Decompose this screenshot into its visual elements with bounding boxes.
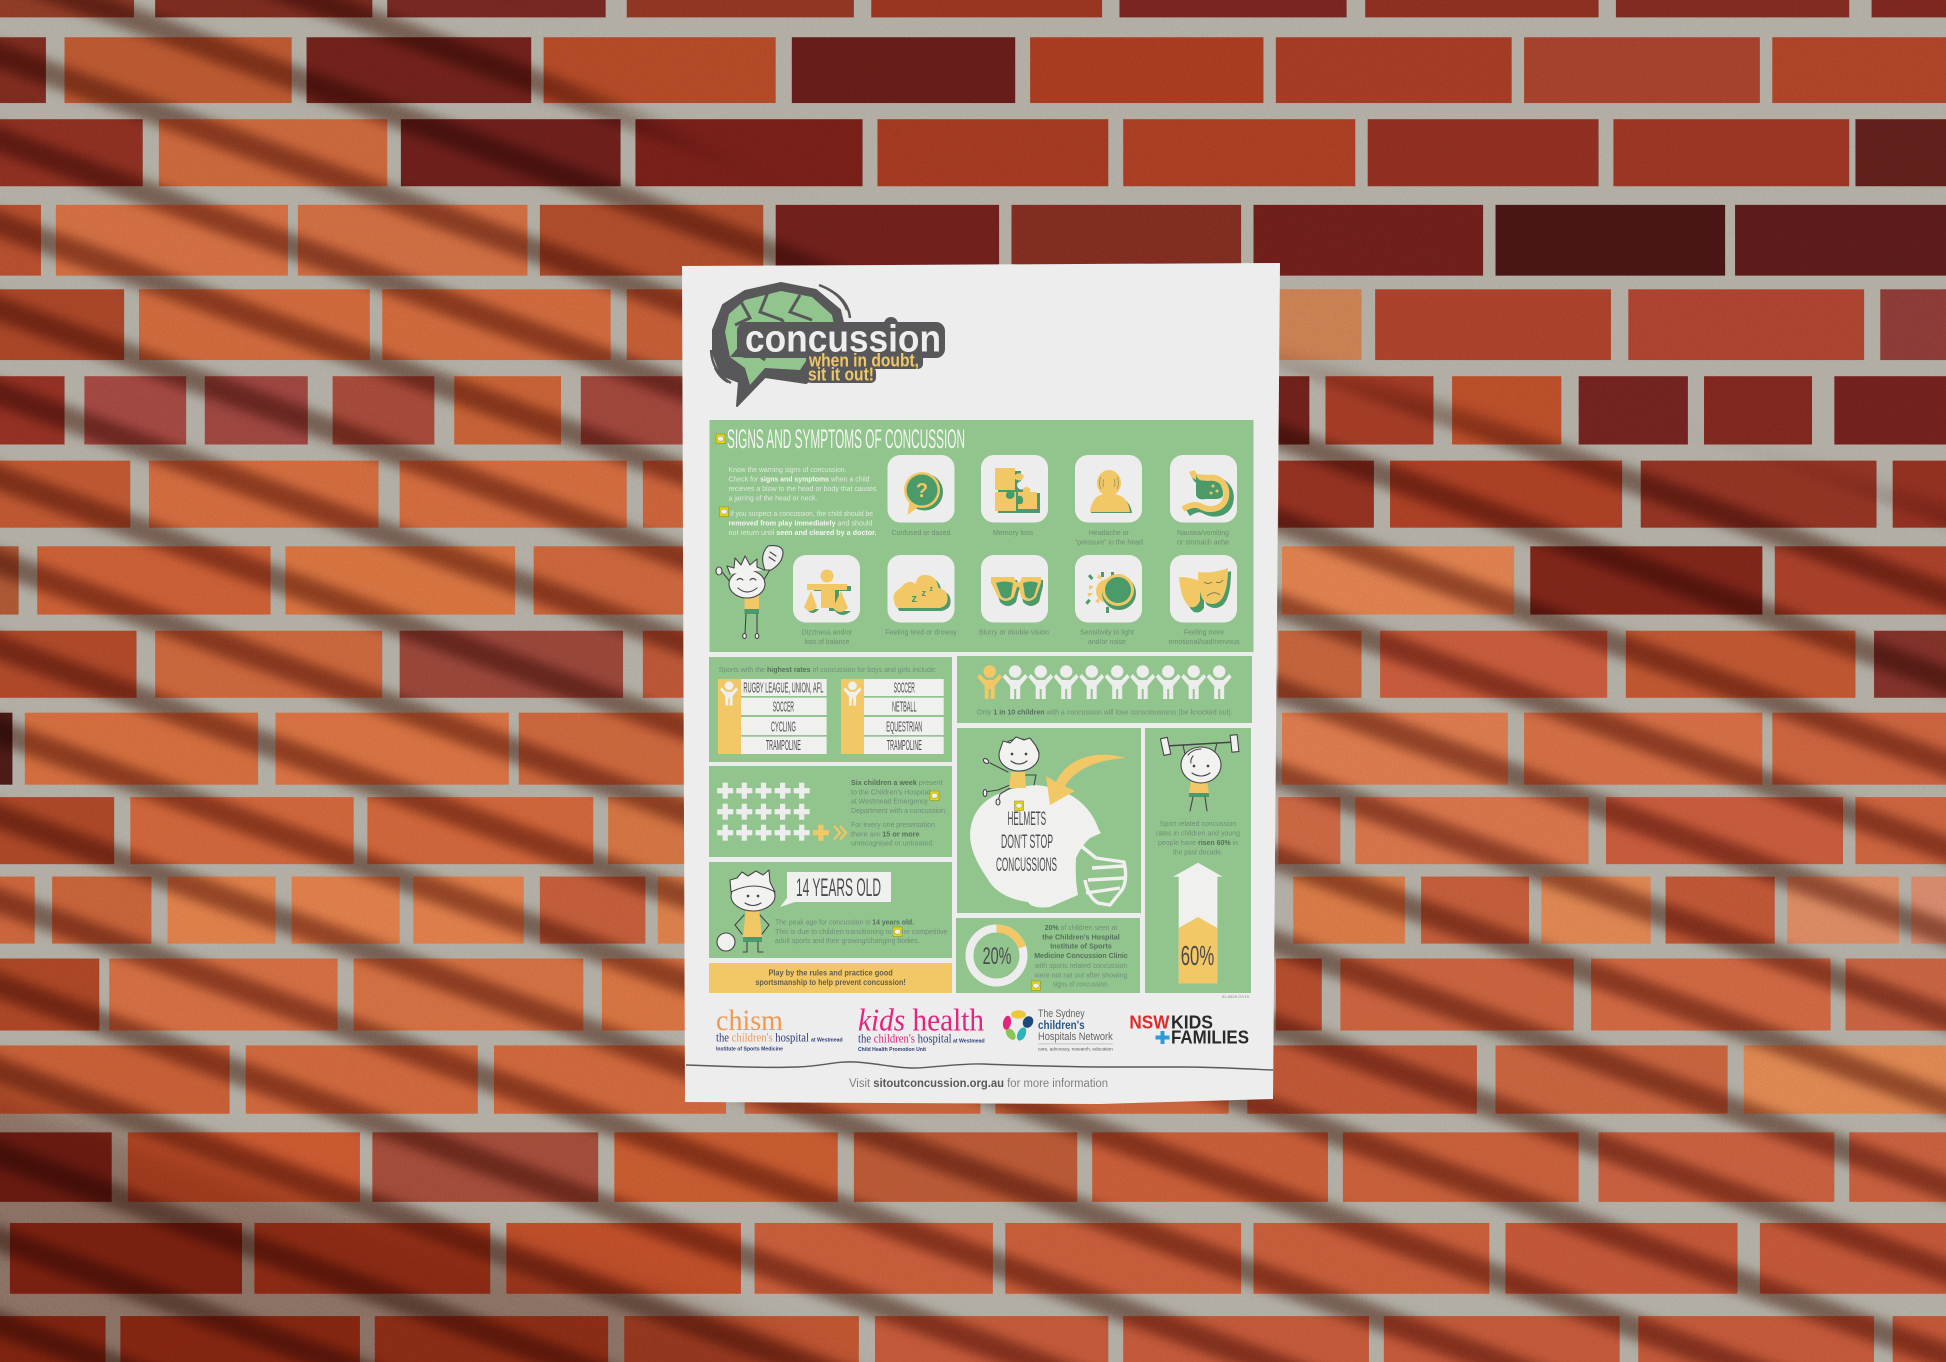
callout: play by the rules: sportsmanship to help prevent concussion!: [755, 978, 906, 987]
girls table: SOCCER: [894, 680, 915, 697]
icon: tired cloud: [888, 555, 954, 622]
panel: sport related rates risen 60%: people have risen 60% in: [1158, 838, 1238, 847]
panel: 14 years old: This is due to children transitioning to more competitive: [775, 927, 948, 936]
logo: Sydney children's hospitals network: [1002, 1008, 1113, 1052]
kid with football: [716, 546, 783, 639]
panel: helmets don't stop concussions: HELMETS: [1008, 809, 1046, 830]
logo: NSW kids + families: KIDS: [1171, 1011, 1213, 1032]
symptom labels: Sensitivity to light: [1080, 628, 1134, 636]
crosses chart: [717, 783, 846, 841]
symptom labels: Dizziness and/or: [802, 628, 853, 636]
panel: six children a week: [709, 766, 952, 857]
symptom labels: emotional/sad/nervous: [1168, 637, 1240, 646]
panel: six children a week: there are 15 or more: [851, 829, 920, 838]
logo: NSW kids + families: [1129, 1011, 1249, 1048]
panel: six children a week: to the Children's Hospital: [851, 787, 930, 796]
boys table: [718, 679, 827, 754]
footer wavy line: [686, 1062, 1273, 1070]
symptom labels: Feeling more: [1184, 628, 1224, 636]
panel: 14 years old: [709, 862, 952, 958]
intro text: [728, 465, 877, 537]
panel: 14 years old: The peak age for concussion is 14 years old.: [775, 918, 914, 926]
icon: memory loss puzzle: [981, 455, 1048, 522]
symptom labels: Headache or: [1089, 528, 1129, 537]
intro text: Know the warning signs of concussion.: [728, 465, 846, 474]
icon: confused: ?: [916, 480, 928, 502]
donut chart 20%: [970, 928, 1024, 982]
logo: NSW kids + families: FAMILIES: [1171, 1026, 1249, 1048]
boys table: TRAMPOLINE: [766, 737, 801, 754]
logo: Sydney children's hospitals network: Hospitals Network: [1038, 1031, 1113, 1043]
logo: chism: [716, 1004, 843, 1052]
panel: 20% of children: Medicine Concussion Clinic: [1034, 951, 1128, 960]
symptom labels: [802, 528, 1240, 646]
kid with ball: [717, 870, 775, 952]
arrow: [1046, 755, 1126, 805]
panel: sport related rates risen 60%: Sport related concussion: [1160, 819, 1236, 828]
print code: ID-0529 07/15: [1222, 994, 1250, 999]
speech box: 14 years old: [780, 872, 891, 907]
panel: 20% of children: with sports related concussion: [1034, 961, 1127, 970]
up arrow 60%: 60%: [1181, 940, 1214, 971]
icon: headache: [1075, 455, 1142, 522]
icon: confused: [888, 455, 954, 522]
callout: play by the rules: [709, 963, 952, 993]
panel: 20% of children: [956, 918, 1140, 993]
logo: kids health: kids health: [858, 1002, 984, 1038]
logo: chism: Institute of Sports Medicine: [716, 1046, 783, 1052]
logo: chism: chism: [716, 1004, 783, 1037]
footer url: Visit sitoutconcussion.org.au for more information: [849, 1078, 1108, 1090]
logo: kids health: Child Health Promotion Unit: [858, 1047, 926, 1053]
panel: 1 in 10 children: [957, 656, 1252, 723]
girls table: EQUESTRIAN: [886, 719, 922, 736]
panel: sports with highest rates: [709, 657, 952, 762]
intro text: If you suspect a concussion, the child should be: [730, 509, 873, 518]
girls table: TRAMPOLINE: [887, 737, 922, 754]
panel: signs and symptoms: [710, 420, 1254, 652]
icon: emotional masks: [1170, 555, 1237, 622]
panel: sport related rates risen 60%: rates in children and young: [1156, 828, 1240, 838]
symptom labels: Confused or dazed: [892, 528, 950, 537]
panel: 20% of children: Institute of Sports: [1050, 942, 1112, 951]
panel: helmets don't stop concussions: DON'T STOP: [1001, 832, 1053, 853]
panel: signs and symptoms: SIGNS AND SYMPTOMS OF CONCUSSION: [727, 424, 965, 454]
icon: tired cloud: z: [922, 588, 926, 598]
icon: tired cloud: z: [912, 593, 918, 605]
logo: chism: at Westmead: [811, 1038, 843, 1044]
symptom labels: and/or noise: [1088, 637, 1126, 646]
panel: six children a week: Six children a week present: [851, 778, 943, 787]
intro text: recieves a blow to the head or body that causes: [728, 484, 877, 493]
symptom labels: Feeling tired or drowsy: [885, 628, 957, 636]
intro text: a jarring of the head or neck.: [728, 494, 818, 502]
logo: Sydney children's hospitals network: The Sydney: [1038, 1008, 1085, 1020]
icon: sensitivity sun: [1075, 555, 1142, 622]
callout: play by the rules: Play by the rules and practice good: [768, 969, 893, 978]
speech box: 14 years old: 14 YEARS OLD: [796, 874, 881, 902]
logo: NSW kids + families: NSW: [1129, 1011, 1170, 1032]
icon: tired cloud: z: [930, 586, 934, 593]
panel: sports with highest rates: Sports with the highest rates of concussion for boys and girls include:: [719, 665, 937, 674]
panel: six children a week: For every one presentation: [851, 820, 935, 829]
boys table: CYCLING: [771, 719, 796, 736]
logo: chism: the children's hospital: [716, 1030, 809, 1045]
panel: 1 in 10 children: Only 1 in 10 children with a concussion will lose consciousness (be knocked out).: [977, 708, 1233, 716]
panel: 20% of children: signs of concussion.: [1053, 980, 1109, 989]
boys table: SOCCER: [773, 699, 794, 716]
poster: [682, 263, 1280, 1104]
panel: helmets don't stop concussions: [957, 728, 1141, 913]
panel: helmets don't stop concussions: CONCUSSIONS: [996, 855, 1057, 876]
logo: Sydney children's hospitals network: care, advocacy, research, education: [1038, 1047, 1113, 1052]
logo: concussion when in doubt, sit it out: when in doubt,: [808, 350, 919, 370]
panel: 20% of children: 20% of children seen at: [1045, 923, 1118, 932]
symptom labels: or stomach ache: [1177, 538, 1229, 546]
kid on helmet: [982, 737, 1039, 805]
girls table: [841, 679, 944, 754]
panel: six children a week: unrecognised or untreated.: [851, 839, 934, 848]
panel: sports with highest rates: RUGBY LEAGUE, UNION, AFL: [743, 680, 823, 697]
symptom labels: Memory loss: [993, 528, 1033, 537]
girls table: NETBALL: [892, 699, 917, 716]
symptom labels: “pressure” in the head: [1075, 538, 1143, 546]
logo: concussion when in doubt, sit it out: [711, 283, 945, 406]
panel: 20% of children: the Children's Hospital: [1042, 932, 1120, 941]
up arrow 60%: [1173, 863, 1223, 983]
symptom labels: Blurry or double vision: [979, 628, 1049, 636]
panel: 14 years old: adult sports and their growing/changing bodies.: [775, 936, 920, 945]
intro text: not return until seen and cleared by a doctor.: [728, 528, 876, 537]
symptom labels: Nausea/vomiting: [1177, 528, 1229, 537]
icon row: ten children: [977, 665, 1232, 699]
logo: kids health: the children's hospital: [858, 1031, 952, 1046]
panel: sport related rates risen 60%: the past decade.: [1173, 848, 1223, 856]
icon: blurry vision glasses: [981, 555, 1048, 622]
panel: six children a week: at Westmead Emergency: [851, 797, 928, 806]
logo: concussion when in doubt, sit it out: sit it out!: [808, 364, 874, 384]
helmet: [970, 785, 1126, 907]
logo: Sydney children's hospitals network: children's: [1038, 1018, 1085, 1032]
kid with barbell: [1160, 735, 1239, 811]
panel: sport related rates risen 60%: [1145, 728, 1251, 993]
icon: nausea stomach: [1170, 455, 1237, 522]
icon: dizziness balance: [793, 555, 860, 622]
logo: concussion when in doubt, sit it out: concussion: [745, 318, 941, 360]
logo: kids health: [858, 1002, 985, 1053]
symptom labels: loss of balance: [804, 637, 850, 646]
panel: six children a week: Department with a concussion.: [851, 806, 947, 815]
panel: 20% of children: were not sat out after showing: [1034, 970, 1127, 979]
intro text: Check for signs and symptoms when a child: [728, 474, 870, 484]
intro text: removed from play immediately and should: [728, 518, 872, 528]
logo: kids health: at Westmead: [953, 1038, 985, 1044]
poster paper: [682, 263, 1280, 1104]
donut chart 20%: 20%: [983, 943, 1011, 970]
